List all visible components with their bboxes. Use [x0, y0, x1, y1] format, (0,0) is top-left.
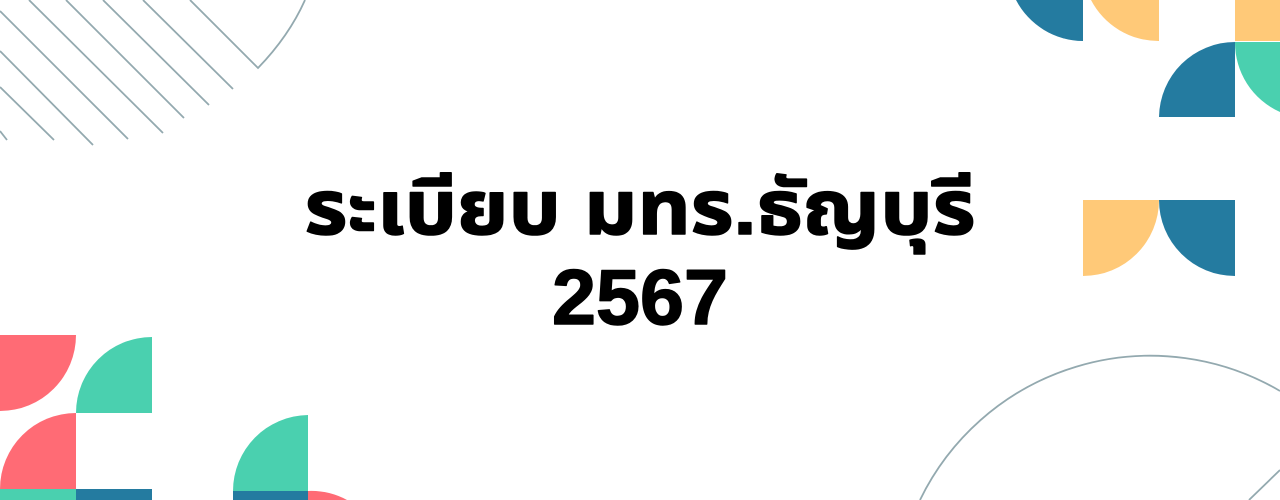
- top-left diagonal line pattern with arc: [0, 0, 305, 145]
- bottom-left geometric shapes: [0, 335, 152, 500]
- bottom-center geometric shapes: [233, 415, 347, 500]
- top-right geometric shapes: [1016, 0, 1280, 117]
- title: ระเบียบ มทร.ธัญบุรี: [304, 166, 976, 254]
- title: [304, 166, 976, 341]
- right-middle geometric shapes: [1083, 200, 1235, 276]
- bottom-right arc outline: [920, 356, 1280, 500]
- title: 2567: [552, 253, 728, 341]
